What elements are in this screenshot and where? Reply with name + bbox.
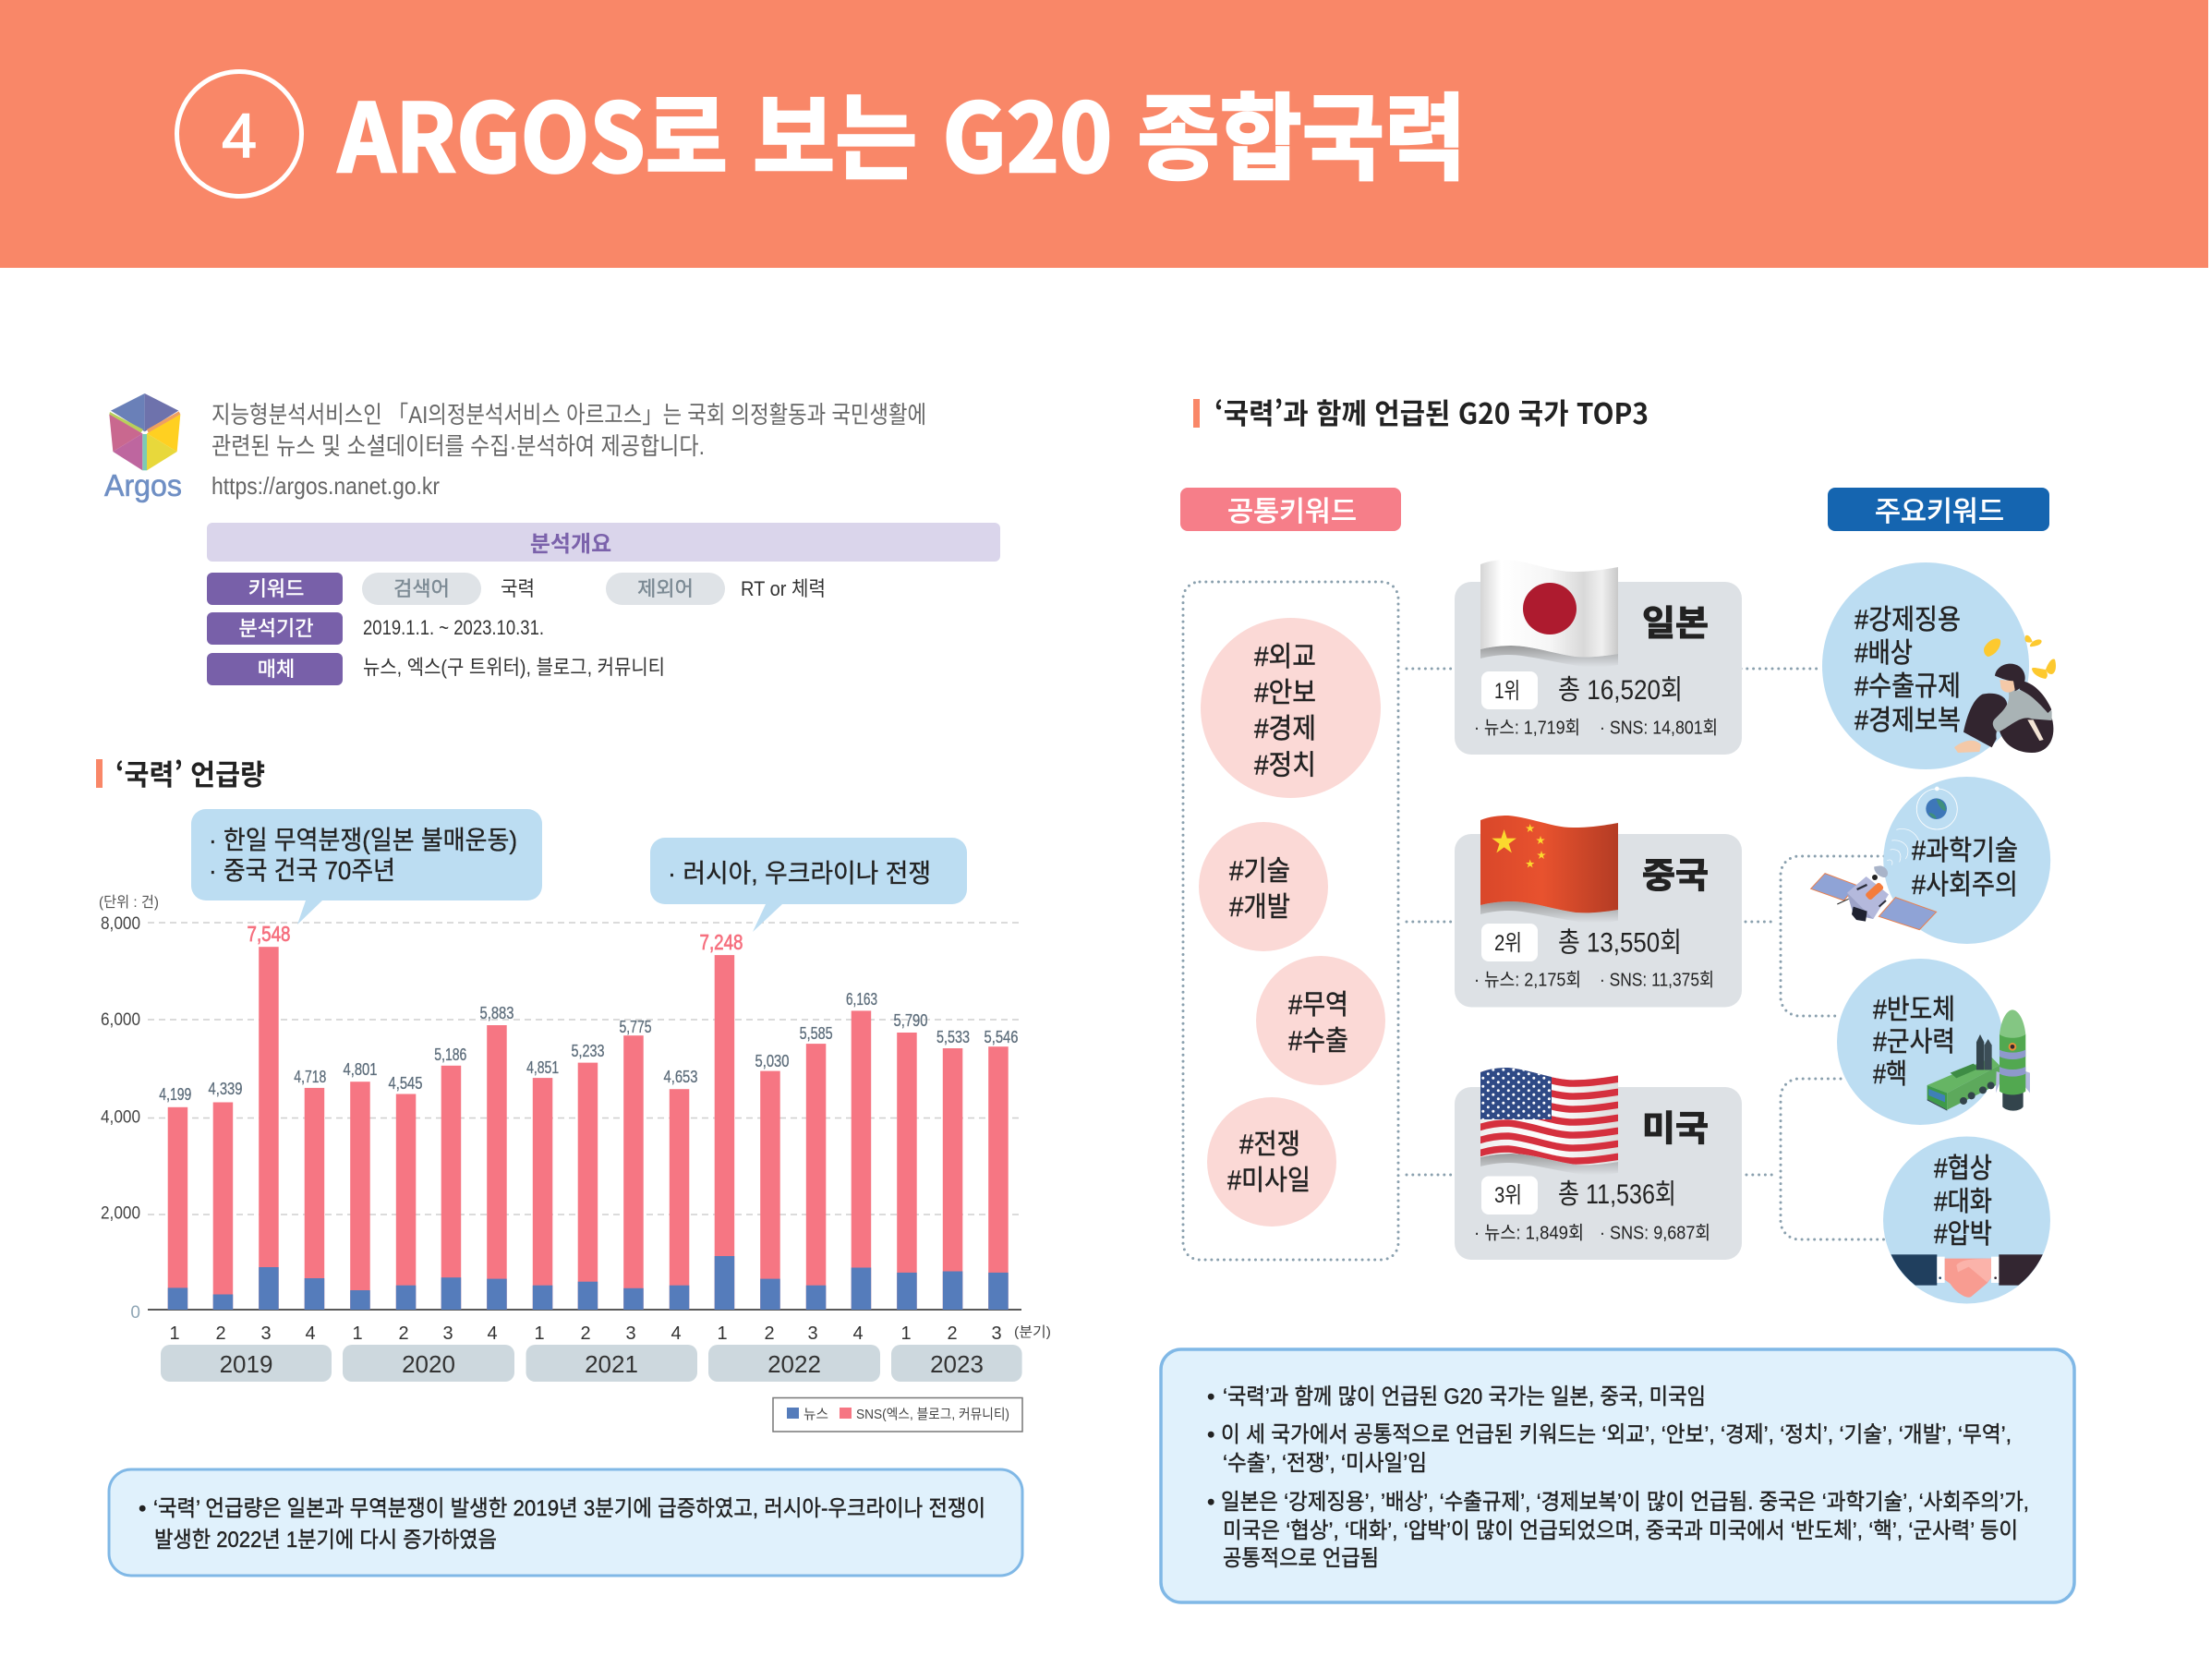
intro text: https://argos.nanet.go.kr (211, 472, 440, 500)
bubble: Japan keywords (1822, 562, 2056, 769)
quarter labels: 1 (717, 1323, 728, 1344)
quarter labels: 2 (947, 1323, 958, 1344)
value labels: 5,030 (755, 1052, 789, 1070)
callout: 2019 Q3: · 중국 건국 70주년 (209, 856, 395, 885)
flag: China (1480, 816, 1618, 923)
value labels: 7,248 (700, 930, 743, 954)
quarter labels: 4 (852, 1323, 864, 1344)
main keyword header (1828, 488, 2049, 531)
bubble: USA keywords: #대화 (1934, 1187, 1992, 1217)
panel: country summary note: • (1207, 1384, 1214, 1409)
quarter labels: 3 (260, 1323, 272, 1344)
bubble: Japan keywords: #수출규제 (1855, 671, 1961, 702)
axis and grid: (단위 : 건) (99, 894, 159, 911)
keyword row: 제외어 (637, 577, 694, 600)
panel: country summary note: 일본은 ‘강제징용’, ’배상’, ‘수출규제’, ‘경제보복’이 많이 언급됨. 중국은 ‘과학기술’, ‘사회주의’가, (1221, 1490, 2029, 1515)
year pills: 2023 (930, 1350, 984, 1378)
panel: analysis overview (207, 523, 1000, 685)
bubble: Japan keywords: #배상 (1855, 638, 1913, 669)
quarter labels: 1 (169, 1323, 180, 1344)
title: ARGOS로 보는 G20 종합국력 (337, 64, 1467, 199)
value labels: 5,775 (619, 1018, 652, 1036)
card: Japan: · SNS: 14,801회 (1600, 717, 1718, 739)
axis and grid: 0 (130, 1303, 140, 1323)
keyword row: 국력 (501, 577, 535, 600)
year pills: 2022 (767, 1350, 821, 1378)
bubble: semiconductor and nuclear keywords: #핵 (1873, 1059, 1907, 1090)
quarter labels: 2 (764, 1323, 775, 1344)
card: USA: 3위 (1494, 1183, 1522, 1208)
quarter labels: 3 (991, 1323, 1002, 1344)
keyword row: RT or 체력 (741, 577, 826, 600)
quarter labels: (분기) (1014, 1324, 1051, 1340)
quarter labels: 3 (442, 1323, 453, 1344)
news bars (168, 1256, 1009, 1310)
card: USA (1455, 1068, 1742, 1260)
keyword bubble: diplomacy: #안보 (1254, 678, 1316, 708)
value labels: 5,233 (571, 1042, 604, 1060)
card: China: 중국 (1642, 847, 1709, 898)
media row: 뉴스, 엑스(구 트위터), 블로그, 커뮤니티 (363, 656, 665, 679)
value labels: 5,790 (894, 1011, 927, 1030)
bubble: Japan keywords: #강제징용 (1855, 605, 1961, 635)
value labels: 4,653 (663, 1068, 698, 1086)
value labels: 6,163 (846, 990, 877, 1009)
axis and grid: 4,000 (101, 1108, 140, 1127)
card: China: · 뉴스: 2,175회 (1474, 970, 1581, 990)
common keyword header (1180, 488, 1401, 531)
period row: 분석기간 (239, 617, 313, 640)
card: USA: · 뉴스: 1,849회 (1474, 1223, 1584, 1243)
card: China: 2위 (1494, 931, 1522, 956)
period row (207, 612, 544, 645)
panel: country summary note: 이 세 국가에서 공통적으로 언급된 키워드는 ‘외교’, ‘안보’, ‘경제’, ‘정치’, ‘기술’, ‘개발’, ‘무역’, (1221, 1422, 2012, 1447)
year pills (161, 1345, 1022, 1382)
keyword row: 키워드 (248, 577, 304, 600)
card: Japan: 총 16,520회 (1558, 675, 1683, 706)
SNS bars (168, 947, 1009, 1310)
bubble: China keywords: #과학기술 (1912, 836, 2018, 866)
section number circle: 4 (222, 101, 257, 171)
bubble: semiconductor and nuclear keywords: #반도체 (1873, 995, 1955, 1025)
callout: 2019 Q3 (191, 809, 542, 925)
panel: mention volume note (109, 1469, 1022, 1576)
axis and grid: 6,000 (101, 1010, 140, 1030)
icon: satellite and earth (1811, 787, 1957, 930)
value labels (159, 922, 1019, 1104)
panel: country summary note: 미국은 ‘협상’, ‘대화’, ‘압박’이 많이 언급되었으며, 중국과 미국에서 ‘반도체’, ‘핵’, ‘군사력’ 등이 (1223, 1518, 2018, 1543)
axis and grid: 8,000 (101, 914, 140, 934)
card: Japan: · 뉴스: 1,719회 (1474, 717, 1580, 739)
quarter labels: 3 (625, 1323, 636, 1344)
panel: country summary note (1161, 1349, 2074, 1602)
value labels: 4,199 (159, 1085, 191, 1104)
card: China: · SNS: 11,375회 (1600, 970, 1714, 990)
intro text: 지능형분석서비스인 「AI의정분석서비스 아르고스」는 국회 의정활동과 국민생활에 (211, 401, 926, 429)
keyword row (207, 573, 826, 605)
quarter labels: 1 (534, 1323, 545, 1344)
keyword bubble: war: #전쟁 (1239, 1130, 1300, 1160)
panel: country summary note: ‘수출’, ‘전쟁’, ‘미사일’임 (1223, 1451, 1427, 1476)
value labels: 4,801 (344, 1060, 377, 1079)
keyword bubble: war (1207, 1097, 1336, 1227)
keyword bubble: trade: #무역 (1288, 990, 1348, 1021)
value labels: 5,546 (985, 1028, 1018, 1046)
bubble: USA keywords: #압박 (1934, 1219, 1992, 1250)
legend: SNS(엑스, 블로그, 커뮤니티) (856, 1407, 1009, 1422)
callout: 2022 Q1: · 러시아, 우크라이나 전쟁 (668, 859, 931, 888)
panel: mention volume note: • (139, 1496, 146, 1521)
header banner (0, 0, 2208, 268)
quarter labels (169, 1323, 1051, 1344)
bubble: semiconductor and nuclear keywords (1837, 959, 2030, 1125)
quarter labels: 2 (580, 1323, 591, 1344)
panel: analysis overview: 분석개요 (530, 532, 611, 557)
value labels: 5,585 (800, 1024, 833, 1043)
panel: country summary note: • (1207, 1422, 1214, 1447)
callout: 2022 Q1 (650, 838, 967, 932)
value labels: 7,548 (248, 922, 290, 946)
legend (773, 1398, 1022, 1432)
flag: USA (1479, 1068, 1620, 1175)
card: China (1455, 816, 1742, 1007)
panel: mention volume note: ‘국력’ 언급량은 일본과 무역분쟁이 발생한 2019년 3분기에 급증하였고, 러시아-우크라이나 전쟁이 (153, 1496, 985, 1521)
keyword bubble: diplomacy: #외교 (1254, 642, 1316, 672)
media row: 매체 (258, 658, 295, 681)
value labels: 4,339 (209, 1080, 242, 1098)
year pills: 2020 (402, 1350, 455, 1378)
section number circle (177, 72, 301, 196)
keyword bubble: war: #미사일 (1227, 1166, 1311, 1196)
connectors (1407, 669, 1885, 1239)
value labels: 5,186 (434, 1045, 466, 1064)
legend: 뉴스 (803, 1407, 828, 1422)
value labels: 4,851 (526, 1058, 559, 1077)
quarter labels: 2 (215, 1323, 226, 1344)
keyword bubble: technology (1199, 822, 1328, 951)
axis and grid: 2,000 (101, 1204, 140, 1223)
period row: 2019.1.1. ~ 2023.10.31. (363, 616, 544, 639)
common keyword header: 공통키워드 (1227, 497, 1357, 527)
icon: crouching woman with butterflies (1954, 635, 2056, 753)
callout: 2019 Q3: · 한일 무역분쟁(일본 불매운동) (209, 826, 517, 854)
value labels: 4,718 (294, 1068, 326, 1086)
bubble: semiconductor and nuclear keywords: #군사력 (1873, 1027, 1955, 1058)
year pills: 2021 (585, 1350, 638, 1378)
intro text (211, 401, 926, 500)
card: Japan: 1위 (1494, 679, 1520, 704)
panel: common keywords (1183, 582, 1398, 1260)
card: USA: · SNS: 9,687회 (1600, 1223, 1710, 1243)
panel: mention volume note: 발생한 2022년 1분기에 다시 증가하였음 (154, 1528, 497, 1553)
heading: top3 countries: ‘국력’과 함께 언급된 G20 국가 TOP3 (1214, 391, 1649, 432)
keyword bubble: technology: #개발 (1229, 892, 1290, 923)
keyword bubble: technology: #기술 (1229, 856, 1290, 887)
value labels: 4,545 (388, 1074, 423, 1093)
icon: missile launcher truck and rocket (1927, 1009, 2030, 1111)
year pills: 2019 (220, 1350, 272, 1378)
bubble: USA keywords (1878, 1136, 2058, 1304)
flag: Japan (1480, 560, 1618, 667)
panel: country summary note: ‘국력’과 함께 많이 언급된 G20 국가는 일본, 중국, 미국임 (1223, 1384, 1706, 1409)
quarter labels: 1 (900, 1323, 912, 1344)
quarter labels: 1 (352, 1323, 363, 1344)
quarter labels: 2 (398, 1323, 409, 1344)
card: Japan: 일본 (1642, 595, 1709, 646)
quarter labels: 4 (671, 1323, 682, 1344)
Argos logo (104, 393, 182, 502)
quarter labels: 3 (807, 1323, 818, 1344)
card: China: 총 13,550회 (1558, 927, 1682, 959)
keyword bubble: trade (1256, 956, 1385, 1085)
Argos logo: Argos (104, 468, 182, 502)
card: USA: 총 11,536회 (1558, 1179, 1676, 1210)
heading: mention volume: ‘국력’ 언급량 (115, 752, 265, 793)
quarter labels: 4 (487, 1323, 498, 1344)
quarter labels: 4 (305, 1323, 316, 1344)
axis and grid (99, 894, 1021, 1323)
icon: handshake (1891, 1254, 2043, 1298)
keyword bubble: diplomacy: #경제 (1254, 714, 1316, 744)
bubble: Japan keywords: #경제보복 (1855, 706, 1961, 736)
bubble: China keywords (1811, 777, 2050, 944)
value labels: 5,883 (480, 1004, 513, 1022)
bubble: China keywords: #사회주의 (1912, 870, 2018, 900)
panel: country summary note: 공통적으로 언급됨 (1223, 1546, 1379, 1571)
value labels: 5,533 (936, 1028, 970, 1046)
keyword row: 검색어 (393, 577, 450, 600)
card: USA: 미국 (1642, 1100, 1709, 1151)
bubble: USA keywords: #협상 (1934, 1154, 1992, 1184)
panel: country summary note: • (1207, 1490, 1214, 1515)
keyword bubble: diplomacy: #정치 (1254, 750, 1316, 781)
main keyword header: 주요키워드 (1875, 497, 2004, 527)
stacked bar chart (99, 894, 1051, 1432)
keyword bubble: diplomacy (1201, 618, 1381, 798)
intro text: 관련된 뉴스 및 소셜데이터를 수집·분석하여 제공합니다. (211, 432, 705, 460)
card: Japan (1455, 560, 1742, 755)
media row (207, 653, 665, 685)
keyword bubble: trade: #수출 (1288, 1026, 1348, 1057)
